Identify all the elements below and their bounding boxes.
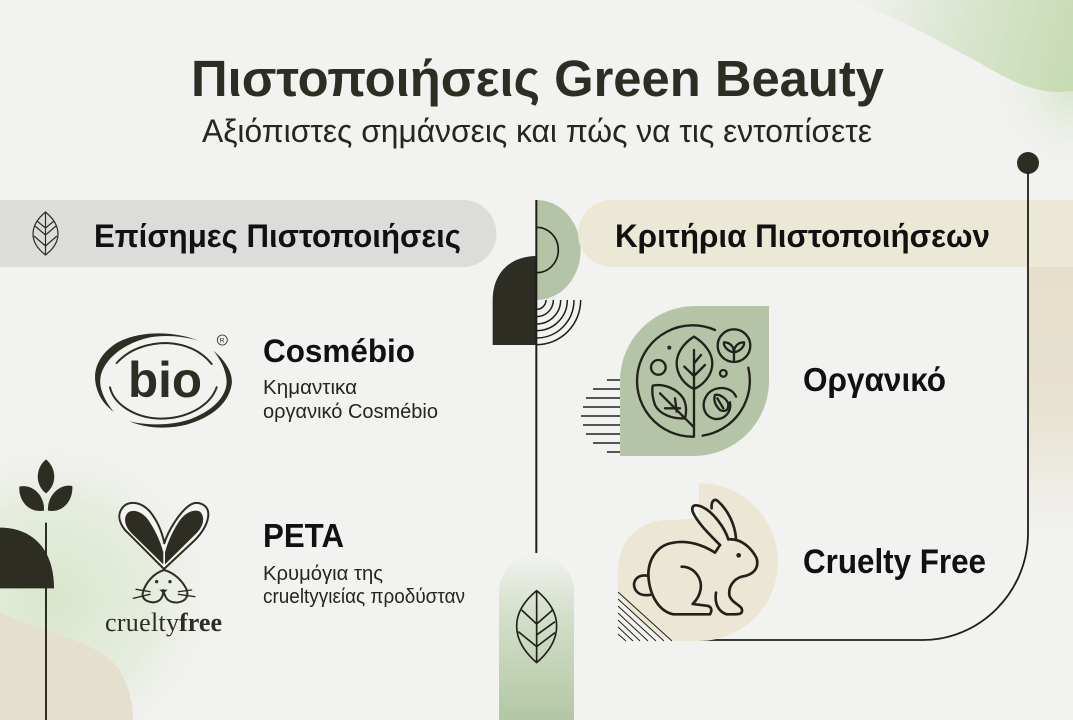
certification: Cosmébio: Κημαντικα <box>263 377 357 399</box>
icon: organic plants in circle <box>637 325 750 437</box>
icon: rabbit <box>634 500 757 614</box>
label: cruelty free: Cruelty Free <box>803 543 986 581</box>
logo: cruelty free bunny: cruelty <box>105 608 179 637</box>
icon: left plant with dome <box>0 459 72 720</box>
label: organic: Οργανικό <box>803 361 946 398</box>
bottom center pill with leaf <box>499 554 574 720</box>
logo: cruelty free bunny: free <box>179 608 222 637</box>
icon: center leaf <box>517 591 557 663</box>
connector line with dot <box>699 152 1039 640</box>
hatching triangle <box>618 592 672 641</box>
logo: cruelty free bunny <box>105 503 222 637</box>
logo: Cosmébio bio <box>95 333 232 428</box>
certification: Cosmébio: οργανικό Cosmébio <box>263 401 438 423</box>
certification: PETA: PETA <box>263 517 344 554</box>
certification: Cosmébio: Cosmébio <box>263 333 415 369</box>
title: Πιστοποιήσεις Green Beauty <box>191 50 885 107</box>
certification: PETA: Κρυμόγια της <box>263 563 383 585</box>
criterion: organic icon <box>581 306 769 456</box>
certification: PETA <box>263 517 465 608</box>
right beige strip <box>1029 267 1073 537</box>
certification: PETA: crueltyγιείας προδύσταν <box>263 586 465 608</box>
background: bottom-left green glow and beige blob <box>0 430 225 720</box>
certification: Cosmébio <box>263 333 438 423</box>
icon: header leaf <box>33 212 58 255</box>
subtitle: Αξιόπιστες σημάνσεις και πώς να τις εντοπίσετε <box>202 113 872 149</box>
hatching lines <box>581 380 620 452</box>
center decorative geometric column <box>493 200 581 553</box>
panel header: certification criteria <box>578 200 1073 267</box>
panel header: official certifications <box>0 200 496 267</box>
background: top-right green wave <box>850 0 1073 180</box>
logo: Cosmébio bio: bio <box>128 352 202 408</box>
logo: Cosmébio bio: R <box>220 338 225 344</box>
sage leaf shape <box>620 306 769 456</box>
beige blob <box>618 483 778 641</box>
criterion: cruelty free icon <box>618 483 778 641</box>
heading: official certifications: Επίσημες Πιστοποιήσεις <box>94 218 461 254</box>
heading: certification criteria: Κριτήρια Πιστοποιήσεων <box>615 218 990 254</box>
